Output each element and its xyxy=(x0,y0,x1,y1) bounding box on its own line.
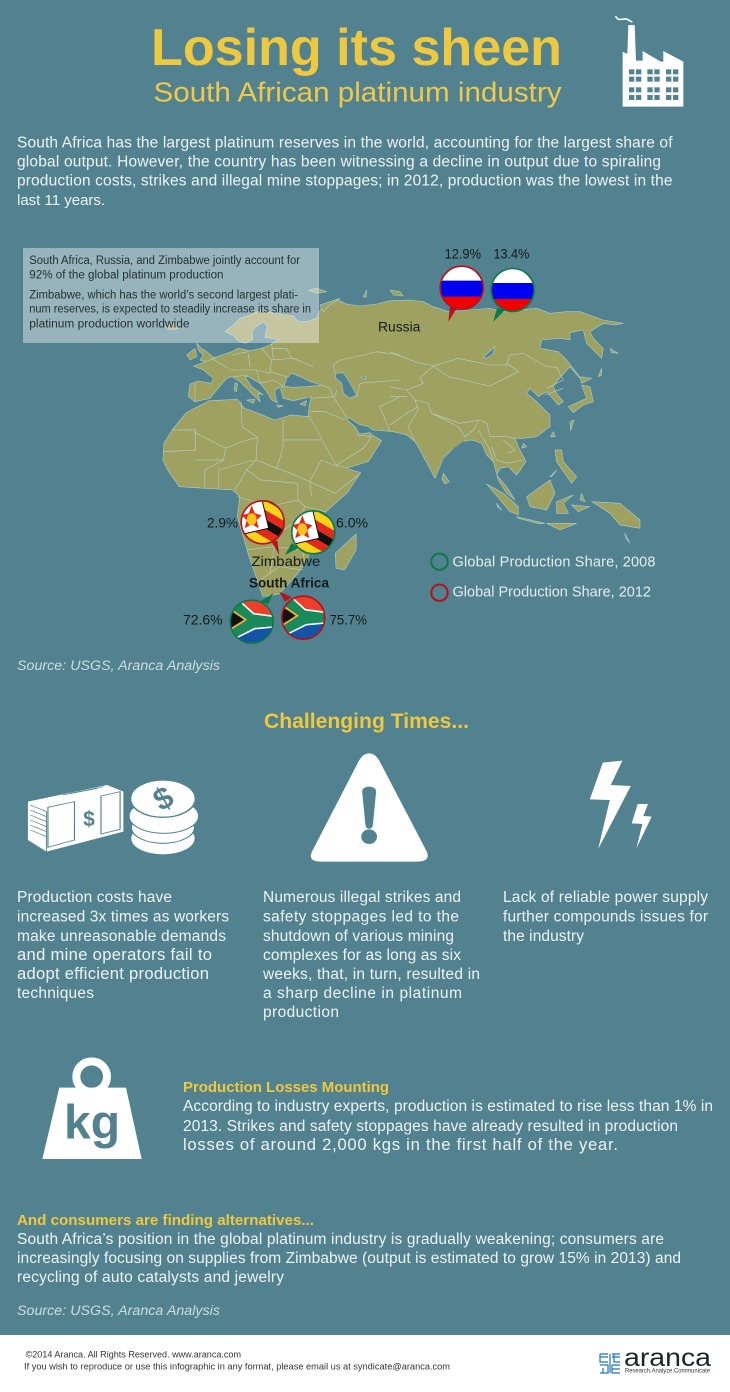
icon: factory xyxy=(616,16,683,107)
text block: production losses: 2013. Strikes and safety stoppages have already resulted in production xyxy=(183,1118,678,1135)
text block: strikes: production xyxy=(263,1004,339,1021)
text block: production costs: increased 3x times as workers xyxy=(17,908,229,926)
borders: Europe and Western Asia xyxy=(195,343,400,465)
text block: production losses xyxy=(183,1079,713,1154)
callout box: Zimbabwe, which has the world’s second largest plati- xyxy=(29,289,298,301)
text block: strikes: a sharp decline in platinum xyxy=(263,985,462,1002)
intro paragraph xyxy=(17,134,673,209)
map: Africa xyxy=(163,399,361,597)
text block: alternatives: South Africa’s position in the global platinum industry is gradually weakening; consumers are xyxy=(17,1231,664,1248)
footer xyxy=(0,1335,730,1392)
text block: strikes: safety stoppages led to the xyxy=(263,908,459,926)
map labels xyxy=(183,245,529,627)
icon: lightning bolts xyxy=(590,761,652,849)
icon: kg weight: kg xyxy=(64,1096,120,1149)
text block: strikes xyxy=(262,889,480,1021)
source note: Source: USGS, Aranca Analysis xyxy=(17,658,220,674)
text block: alternatives: recycling of auto catalysts and jewelry xyxy=(17,1269,284,1286)
icon: kg weight xyxy=(42,1061,142,1159)
map labels: South Africa xyxy=(249,575,329,591)
callout box xyxy=(23,248,319,343)
text block: strikes: complexes for as long as six xyxy=(263,947,461,964)
text block: power supply: the industry xyxy=(503,928,584,945)
logo: aranca: Research.Analyze.Communicate xyxy=(625,1368,711,1374)
legend: Global Production Share, 2008 xyxy=(452,555,656,571)
callout box: 92% of the global platinum production xyxy=(29,269,224,281)
text block: power supply: Lack of reliable power supply xyxy=(503,889,708,906)
European islands xyxy=(165,288,403,407)
marker: South Africa 2008 xyxy=(227,593,277,647)
title: Losing its sheen xyxy=(151,19,562,77)
callout box: South Africa, Russia, and Zimbabwe jointly account for xyxy=(29,255,300,267)
text block: production costs: Production costs have xyxy=(17,889,172,906)
borders: Africa xyxy=(164,402,358,580)
text block: production losses: Production Losses Mounting xyxy=(183,1079,389,1096)
intro paragraph: global output. However, the country has been witnessing a decline in output due to spiraling xyxy=(17,154,661,171)
text block: production costs: adopt efficient production xyxy=(17,964,209,983)
copyright text: If you wish to reproduce or use this infographic in any format, please email us at syndicate@aranca.com xyxy=(24,1362,450,1372)
icon: money: $ xyxy=(83,808,95,831)
map labels: Russia xyxy=(378,319,421,335)
map labels: 2.9% xyxy=(207,515,238,531)
text block: alternatives: increasingly focusing on supplies from Zimbabwe (output is estimated to grow 15% in 2013) and xyxy=(17,1250,681,1267)
text block: strikes: weeks, that, in turn, resulted in xyxy=(262,966,480,983)
text block: strikes: shutdown of various mining xyxy=(263,928,454,945)
copyright text xyxy=(24,1350,450,1372)
callout box: platinum production worldwide xyxy=(29,318,189,330)
marker: Zimbabwe 2008 xyxy=(261,482,365,583)
map: Eurasia xyxy=(165,288,623,500)
copyright text: ©2014 Aranca. All Rights Reserved. www.aranca.com xyxy=(26,1350,241,1361)
source note: Source: USGS, Aranca Analysis xyxy=(17,1303,220,1319)
text block: production costs xyxy=(17,889,229,1002)
legend: Global Production Share, 2012 xyxy=(452,585,651,601)
text block: production costs: and mine operators fail to xyxy=(17,945,212,964)
legend xyxy=(431,554,656,601)
Asian islands xyxy=(442,348,640,543)
map labels: Zimbabwe xyxy=(251,553,321,569)
inland seas xyxy=(284,347,495,398)
text block: production costs: techniques xyxy=(17,985,94,1002)
icon: money xyxy=(28,779,199,854)
icon: warning triangle xyxy=(311,753,428,862)
map labels: 72.6% xyxy=(183,611,222,627)
map: Asia borders and islands xyxy=(390,348,640,543)
text block: alternatives: And consumers are finding alternatives... xyxy=(17,1212,314,1229)
intro paragraph: South Africa has the largest platinum reserves in the world, accounting for the largest share of xyxy=(17,134,673,152)
text block: alternatives xyxy=(17,1212,681,1286)
text block: production losses: losses of around 2,000 kgs in the first half of the year. xyxy=(183,1135,618,1154)
map panel xyxy=(23,245,656,647)
map labels: 13.4% xyxy=(494,245,529,261)
text block: strikes: Numerous illegal strikes and xyxy=(263,889,461,906)
intro paragraph: production costs, strikes and illegal mine stoppages; in 2012, production was the lowest in the xyxy=(17,173,672,190)
marker: Zimbabwe 2012 xyxy=(211,472,315,573)
subtitle: South African platinum industry xyxy=(154,76,562,108)
marker: Russia 2012 xyxy=(437,263,487,322)
map labels: 6.0% xyxy=(336,515,368,531)
logo: aranca: aranca xyxy=(624,1344,711,1372)
marker: Russia 2008 xyxy=(488,265,538,322)
text block: production losses: According to industry experts, production is estimated to rise less than 1% in xyxy=(183,1098,713,1115)
map labels: 12.9% xyxy=(445,245,481,261)
marker: South Africa 2012 xyxy=(278,592,328,643)
logo: aranca xyxy=(600,1344,711,1374)
map labels: 75.7% xyxy=(330,611,367,627)
callout box: num reserves, is expected to steadily increase its share in xyxy=(29,304,311,316)
text block: power supply: further compounds issues for xyxy=(503,908,708,926)
icon: money: $ xyxy=(147,779,179,818)
text block: power supply xyxy=(503,889,708,945)
text block: production costs: make unreasonable demands xyxy=(17,928,226,945)
land interior fill xyxy=(235,313,577,470)
Madagascar xyxy=(335,534,356,570)
intro paragraph: last 11 years. xyxy=(17,192,105,209)
header xyxy=(151,19,562,108)
section heading: Challenging Times... xyxy=(264,710,469,733)
